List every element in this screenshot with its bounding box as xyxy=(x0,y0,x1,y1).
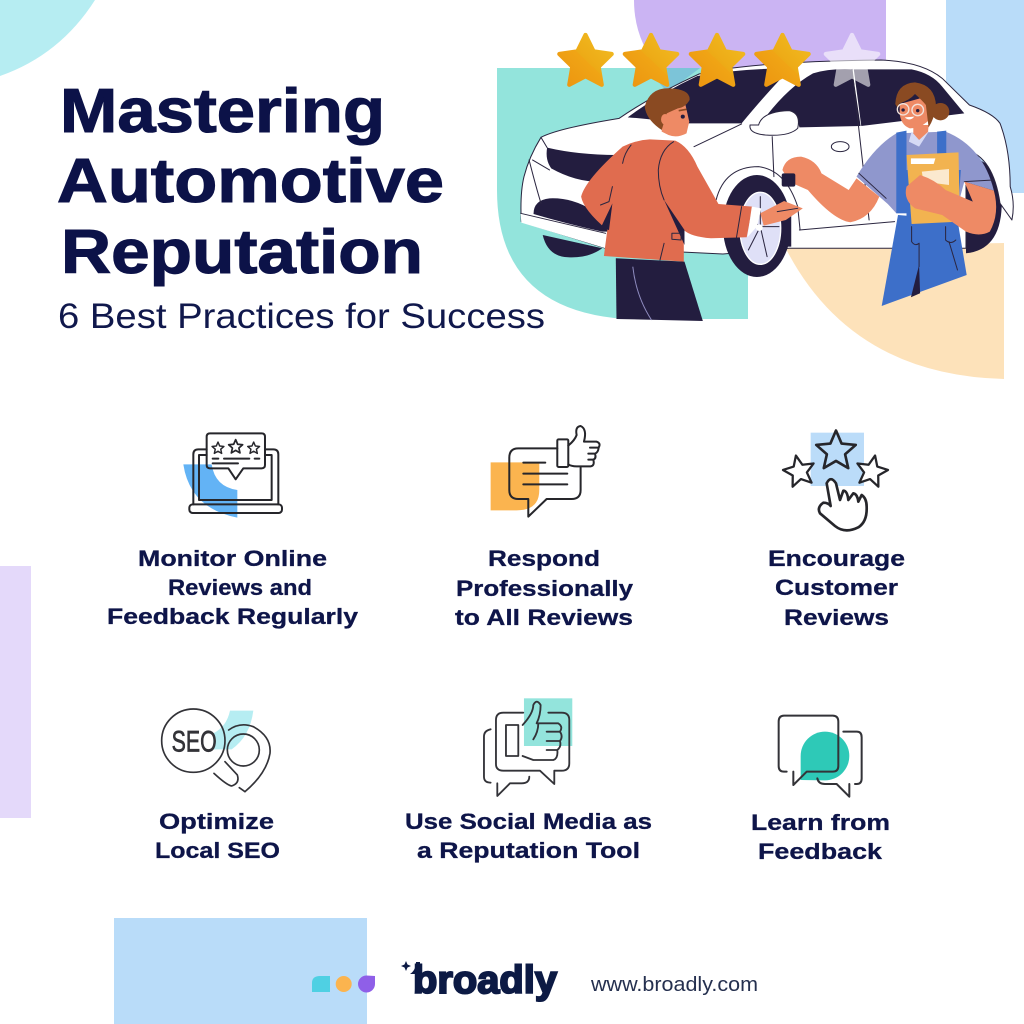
label: monitor reviews: Monitor Online xyxy=(138,546,327,571)
label: local SEO xyxy=(155,809,280,863)
icon: two chat bubbles xyxy=(779,716,862,797)
logo: broadly: broadly xyxy=(413,959,557,1002)
icon: social media thumbs up bubbles xyxy=(484,698,572,796)
label: respond professionally: Professionally xyxy=(456,576,634,601)
title xyxy=(57,77,444,287)
title: Reputation xyxy=(61,218,423,287)
subtitle: 6 Best Practices for Success xyxy=(58,297,545,336)
icon: three stars with pointing hand xyxy=(781,431,890,530)
label: encourage reviews: Customer xyxy=(775,575,898,600)
hero illustration: car handover xyxy=(497,0,1024,379)
label: local SEO: Local SEO xyxy=(155,838,280,863)
label: learn from feedback: Learn from xyxy=(751,810,890,835)
woman mechanic with folder xyxy=(782,82,996,306)
website url: www.broadly.com xyxy=(590,974,758,996)
logo dots xyxy=(312,976,375,992)
label: learn from feedback: Feedback xyxy=(758,839,883,864)
label: monitor reviews: Feedback Regularly xyxy=(107,604,359,629)
background shape: cyan corner xyxy=(0,0,95,76)
man in orange jacket xyxy=(581,88,803,321)
label: respond professionally xyxy=(455,546,634,630)
label: encourage reviews: Encourage xyxy=(768,546,905,571)
background shape: left lilac bar xyxy=(0,566,31,818)
label: respond professionally: Respond xyxy=(488,546,600,571)
car xyxy=(521,60,1013,277)
label: social media: a Reputation Tool xyxy=(417,838,640,863)
label: encourage reviews: Reviews xyxy=(784,605,889,630)
label: local SEO: Optimize xyxy=(159,809,274,834)
background shape: bottom blue block xyxy=(114,918,367,1024)
label: monitor reviews: Reviews and xyxy=(168,575,312,600)
title: Mastering xyxy=(60,77,385,146)
label: respond professionally: to All Reviews xyxy=(455,605,633,630)
hero background shapes xyxy=(497,0,1024,379)
label: social media xyxy=(405,809,652,863)
label: social media: Use Social Media as xyxy=(405,809,652,834)
icon: SEO magnifier and map pin xyxy=(162,709,270,792)
rating stars xyxy=(559,35,878,85)
label: monitor reviews xyxy=(107,546,359,629)
title: Automotive xyxy=(57,147,444,216)
icon: SEO magnifier and map pin: SEO xyxy=(172,726,217,759)
label: encourage reviews xyxy=(768,546,905,630)
label: learn from feedback xyxy=(751,810,890,864)
icon: laptop with star review xyxy=(183,433,282,518)
icon: speech bubble with thumbs up xyxy=(491,426,600,517)
